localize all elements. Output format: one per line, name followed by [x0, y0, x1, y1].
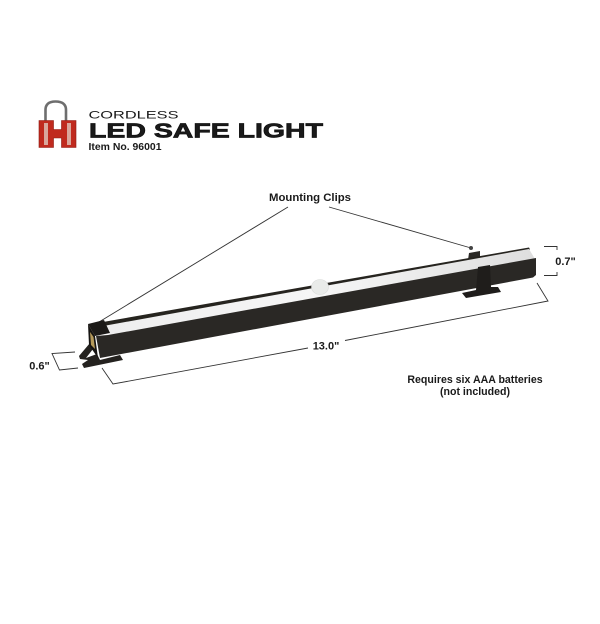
note: battery requirement: (not included): [440, 386, 510, 398]
dimension: 0.6 inch: [29, 352, 78, 372]
dimension: 0.7 inch: [544, 246, 576, 276]
heading: LED Safe Light: LED SAFE LIGHT: [89, 120, 323, 142]
black bar body: [96, 258, 536, 358]
right foot clip: [462, 265, 501, 298]
heading: cordless: CORDLESS: [88, 110, 178, 122]
icon: padlock logo: [39, 102, 76, 148]
dimension: 0.7 inch: 0.7": [555, 256, 576, 268]
left end cap top: [88, 320, 110, 336]
left end cap side: [88, 324, 98, 358]
label: mounting clips: Mounting Clips: [269, 192, 351, 204]
arrow: leader line to right mounting clip: [329, 207, 471, 248]
white lens strip: [106, 249, 535, 335]
note: battery requirement: Requires six AAA batteries: [407, 374, 543, 386]
dimension: 0.6 inch: 0.6": [29, 360, 50, 372]
motion sensor: [312, 280, 328, 294]
dimension: 13.0 inch length: 13.0": [313, 340, 339, 352]
left mounting foot clip: [79, 343, 123, 368]
battery end gold detail: [90, 332, 95, 349]
note: battery requirement: [407, 374, 543, 398]
rear right mounting clip: [468, 251, 480, 260]
product: LED safe light bar: [79, 246, 536, 368]
text: item number: Item No. 96001: [88, 142, 162, 153]
dimension: 13.0 inch length: [102, 283, 548, 384]
light bar top rim: [103, 248, 530, 326]
arrow: leader line to left mounting clip: [99, 207, 288, 322]
